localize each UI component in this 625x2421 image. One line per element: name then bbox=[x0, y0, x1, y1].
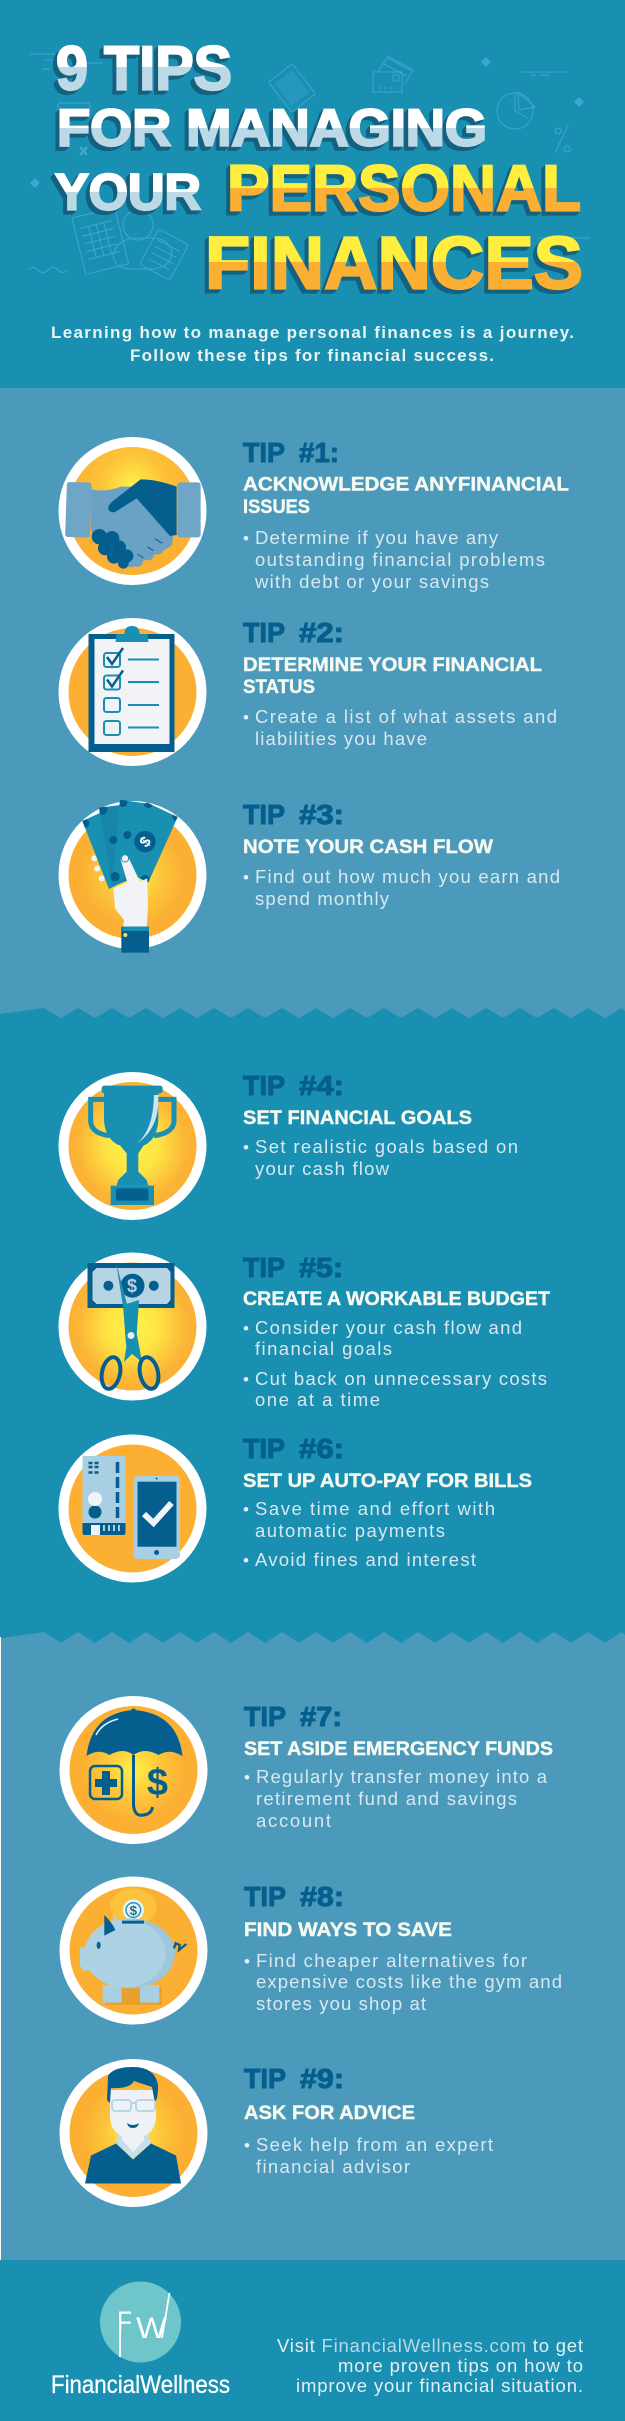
tip 7 label bbox=[244, 1701, 342, 1732]
title: PERSONAL bbox=[227, 152, 581, 224]
tip 4 label: #4: bbox=[299, 1070, 344, 1101]
tip 8 body bbox=[244, 1950, 562, 2014]
tip 4 bbox=[58, 1070, 518, 1220]
icon: scissors cutting a bill: $ bbox=[127, 1276, 137, 1296]
tip 9 heading: ASK FOR ADVICE bbox=[244, 2102, 415, 2124]
footer call to action: Visit FinancialWellness.com to get bbox=[277, 2335, 583, 2356]
panel: tips 7 to 9 bbox=[0, 1632, 625, 2260]
tip 3 body bbox=[243, 866, 560, 909]
tip 6 body: • bbox=[243, 1551, 249, 1570]
panel: tips 1 to 3 bbox=[0, 388, 625, 1018]
footer call to action bbox=[277, 2335, 583, 2396]
tip 1 label: #1: bbox=[299, 437, 339, 468]
tip 7 body bbox=[244, 1766, 548, 1831]
tip 8 body: stores you shop at bbox=[256, 1993, 426, 2014]
tip 2 label bbox=[243, 617, 344, 648]
tip 4 body: Set realistic goals based on bbox=[255, 1136, 518, 1157]
tip 3 label: #3: bbox=[299, 799, 344, 830]
header background bbox=[0, 0, 625, 388]
tip 6 body bbox=[243, 1498, 495, 1570]
icon: scissors cutting a bill bbox=[58, 1252, 206, 1400]
icon: credit card and phone bbox=[58, 1434, 206, 1582]
tip 5 body: one at a time bbox=[255, 1389, 380, 1410]
tip 2 body: Create a list of what assets and bbox=[255, 706, 557, 727]
tip 5 label bbox=[243, 1252, 343, 1283]
tip 8 label: #8: bbox=[300, 1881, 344, 1912]
tip 7 body: Regularly transfer money into a bbox=[256, 1766, 548, 1787]
tip 5 body: Consider your cash flow and bbox=[255, 1317, 522, 1338]
title: FOR MANAGING bbox=[57, 100, 487, 158]
footer call to action: more proven tips on how to bbox=[338, 2355, 583, 2376]
icon: piggy bank with coin: $ bbox=[130, 1903, 138, 1918]
tip 2 label: TIP bbox=[243, 617, 285, 648]
title bbox=[55, 34, 583, 304]
tip 9 bbox=[60, 2059, 493, 2207]
subtitle bbox=[51, 323, 574, 365]
tip 1 body: • bbox=[243, 529, 249, 548]
tip 2 body: liabilities you have bbox=[255, 728, 427, 749]
icon: clipboard checklist bbox=[58, 618, 206, 766]
logo: FinancialWellness: FinancialWellness bbox=[51, 2371, 230, 2399]
tip 3 body: • bbox=[243, 868, 249, 887]
tip 8 label: TIP bbox=[244, 1881, 286, 1912]
tip 8 body: expensive costs like the gym and bbox=[256, 1971, 562, 1992]
tip 1 heading: ACKNOWLEDGE ANYFINANCIAL bbox=[243, 474, 569, 496]
logo: FinancialWellness bbox=[51, 2282, 230, 2399]
tip 6 body: Save time and effort with bbox=[255, 1498, 495, 1519]
tip 3 label bbox=[243, 799, 344, 830]
icon: umbrella over medical kit and dollar bbox=[60, 1696, 208, 1844]
tip 6 bbox=[58, 1433, 532, 1582]
tip 6 body: automatic payments bbox=[255, 1520, 445, 1541]
header decorative diamonds bbox=[30, 57, 584, 188]
tip 7 heading: SET ASIDE EMERGENCY FUNDS bbox=[244, 1738, 553, 1760]
tip 5 heading: CREATE A WORKABLE BUDGET bbox=[243, 1288, 550, 1310]
tip 5 body bbox=[243, 1317, 547, 1410]
tip 9 label: #9: bbox=[300, 2063, 344, 2094]
tip 8 body: Find cheaper alternatives for bbox=[256, 1950, 527, 1971]
tip 6 body: • bbox=[243, 1500, 249, 1519]
tip 2 bbox=[58, 617, 557, 766]
tip 6 label bbox=[243, 1433, 344, 1464]
tip 3 body: Find out how much you earn and bbox=[255, 866, 560, 887]
tip 1 bbox=[58, 437, 569, 592]
icon: piggy bank with coin bbox=[60, 1876, 208, 2024]
tip 5 body: • bbox=[243, 1370, 249, 1389]
tip 7 body: • bbox=[244, 1768, 250, 1787]
footer panel bbox=[0, 2260, 625, 2421]
subtitle: Follow these tips for financial success. bbox=[130, 346, 494, 365]
tip 9 label: TIP bbox=[244, 2063, 286, 2094]
tip 9 label bbox=[244, 2063, 344, 2094]
tip 8 label bbox=[244, 1881, 344, 1912]
tip 9 body: Seek help from an expert bbox=[256, 2134, 493, 2155]
tip 4 label: TIP bbox=[243, 1070, 285, 1101]
footer call to action: improve your financial situation. bbox=[296, 2375, 583, 2396]
tip 1 heading: ISSUES bbox=[243, 496, 310, 518]
tip 4 label bbox=[243, 1070, 344, 1101]
tip 2 body bbox=[243, 706, 557, 749]
tip 5 bbox=[58, 1252, 550, 1410]
tip 2 label: #2: bbox=[299, 617, 344, 648]
tip 1 label bbox=[243, 437, 339, 468]
title: YOUR bbox=[55, 164, 201, 220]
tip 9 body: • bbox=[244, 2136, 250, 2155]
tip 7 body: retirement fund and savings bbox=[256, 1788, 517, 1809]
title: 9 TIPS bbox=[56, 34, 232, 104]
logo: FinancialWellness: W bbox=[136, 2312, 168, 2345]
tip 9 body: financial advisor bbox=[256, 2156, 410, 2177]
tip 1 body: with debt or your savings bbox=[254, 571, 489, 592]
icon: handshake bbox=[58, 437, 206, 585]
tip 1 body bbox=[243, 527, 545, 592]
tip 8 bbox=[60, 1876, 562, 2024]
tip 5 body: financial goals bbox=[255, 1338, 392, 1359]
tip 7 label: #7: bbox=[300, 1701, 342, 1732]
tip 4 body bbox=[243, 1136, 518, 1179]
tip 1 label: TIP bbox=[243, 437, 285, 468]
tip 9 body bbox=[244, 2134, 493, 2177]
tip 5 label: TIP bbox=[243, 1252, 285, 1283]
icon: trophy bbox=[58, 1072, 206, 1220]
header decorative finance icons bbox=[28, 54, 590, 280]
tip 5 label: #5: bbox=[299, 1252, 343, 1283]
tip 2 heading: STATUS bbox=[243, 676, 315, 698]
tip 6 heading: SET UP AUTO-PAY FOR BILLS bbox=[243, 1470, 532, 1492]
title: FINANCES bbox=[205, 222, 583, 304]
tip 5 body: Cut back on unnecessary costs bbox=[255, 1368, 547, 1389]
tip 8 body: • bbox=[244, 1952, 250, 1971]
tip 7 bbox=[60, 1696, 553, 1844]
icon: financial advisor bbox=[60, 2059, 208, 2207]
tip 1 body: Determine if you have any bbox=[255, 527, 499, 548]
tip 6 label: TIP bbox=[243, 1433, 285, 1464]
subtitle: Learning how to manage personal finances is a journey. bbox=[51, 323, 574, 342]
tip 3 heading: NOTE YOUR CASH FLOW bbox=[243, 836, 494, 858]
tip 2 body: • bbox=[243, 708, 249, 727]
tip 4 body: your cash flow bbox=[255, 1158, 390, 1179]
tip 8 heading: FIND WAYS TO SAVE bbox=[244, 1919, 452, 1941]
tip 7 body: account bbox=[256, 1810, 331, 1831]
logo: FinancialWellness: F bbox=[117, 2306, 132, 2339]
panel: tips 4 to 6 bbox=[0, 1019, 625, 1631]
icon: umbrella over medical kit and dollar: $ bbox=[147, 1762, 168, 1804]
tip 4 heading: SET FINANCIAL GOALS bbox=[243, 1107, 472, 1129]
tip 7 label: TIP bbox=[244, 1701, 286, 1732]
tip 3 bbox=[58, 798, 560, 953]
tip 2 heading: DETERMINE YOUR FINANCIAL bbox=[243, 654, 542, 676]
tip 3 label: TIP bbox=[243, 799, 285, 830]
tip 5 body: • bbox=[243, 1319, 249, 1338]
tip 6 label: #6: bbox=[299, 1433, 344, 1464]
tip 2 heading bbox=[243, 654, 542, 698]
tip 4 body: • bbox=[243, 1138, 249, 1157]
icon: hand holding cash bbox=[58, 798, 206, 953]
tip 1 heading bbox=[243, 474, 569, 518]
tip 3 body: spend monthly bbox=[255, 888, 390, 909]
icon: hand holding cash: $ bbox=[136, 833, 155, 851]
tip 1 body: outstanding financial problems bbox=[255, 549, 545, 570]
tip 6 body: Avoid fines and interest bbox=[255, 1549, 476, 1570]
